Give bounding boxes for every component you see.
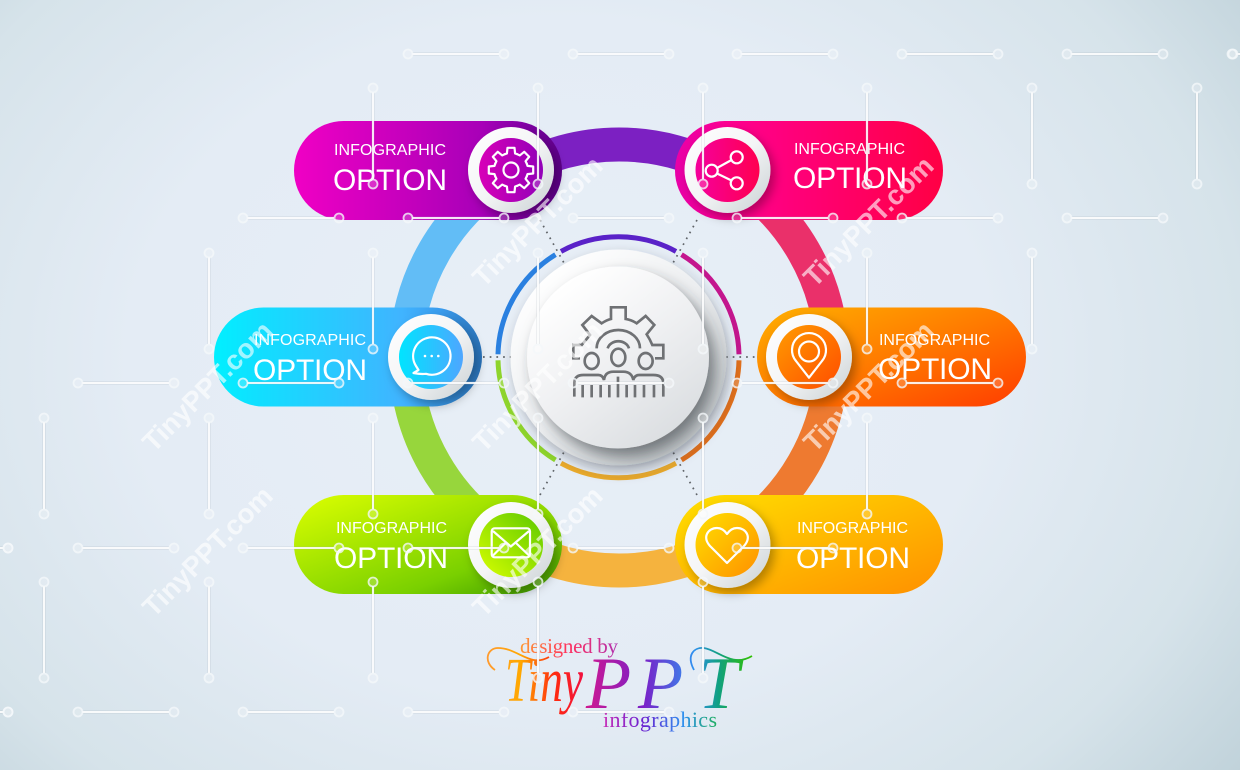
panel: option top left (purple) [294, 121, 562, 220]
heading: option 2: OPTION [793, 162, 907, 195]
heading: option 3 [253, 332, 367, 387]
heading: option 1: INFOGRAPHIC [334, 142, 446, 159]
heading: option 1 [333, 142, 447, 197]
panel: option bottom left (green) [294, 495, 562, 594]
icon: chat bubble [388, 314, 474, 400]
watermarks: TinyPPT.com [466, 150, 609, 293]
heading: option 6 [796, 520, 910, 575]
heading: option 3: INFOGRAPHIC [254, 332, 366, 349]
watermarks: TinyPPT.com [136, 480, 279, 623]
big colored ring [406, 144, 832, 571]
watermarks: TinyPPT.com [136, 315, 279, 458]
heading: option 6: OPTION [796, 542, 910, 575]
panel: option bottom right (yellow) [675, 495, 943, 594]
heading: option 2: INFOGRAPHIC [794, 141, 905, 158]
logo: designed by TinyPPT infographics [488, 634, 752, 732]
icon: gear and team [573, 307, 663, 397]
watermarks [136, 150, 940, 623]
icon: envelope [468, 502, 554, 588]
watermarks: TinyPPT.com [797, 315, 940, 458]
panel: option middle right (orange) [757, 308, 1026, 406]
icon: share [684, 127, 770, 213]
logo: designed by TinyPPT infographics: designed by [520, 634, 618, 658]
heading: option 4 [878, 332, 992, 386]
watermarks: TinyPPT.com [797, 150, 940, 293]
heading: option 5: INFOGRAPHIC [336, 520, 447, 537]
heading: option 4: INFOGRAPHIC [879, 332, 990, 349]
heading: option 3: OPTION [253, 354, 367, 387]
thin segmented inner ring [498, 237, 739, 478]
icon: heart [684, 502, 770, 588]
heading: option 5: OPTION [334, 542, 448, 575]
watermarks: TinyPPT.com [466, 315, 609, 458]
watermarks: TinyPPT.com [466, 480, 609, 623]
heading: option 1: OPTION [333, 164, 447, 197]
heading: option 2 [793, 141, 907, 195]
logo: designed by TinyPPT infographics: Tiny [505, 647, 583, 715]
heading: option 5 [334, 520, 448, 575]
panel: option middle left (blue) [214, 308, 482, 406]
dotted connector spokes [483, 220, 757, 495]
heading: option 4: OPTION [878, 353, 992, 386]
heading: option 6: INFOGRAPHIC [797, 520, 908, 537]
center disc [510, 250, 726, 466]
logo: designed by TinyPPT infographics: infographics [603, 707, 717, 732]
panel: option top right (pink) [675, 121, 943, 220]
icon: location pin [766, 314, 852, 400]
icon: gear [468, 127, 554, 213]
logo: designed by TinyPPT infographics: PPT [585, 643, 744, 725]
